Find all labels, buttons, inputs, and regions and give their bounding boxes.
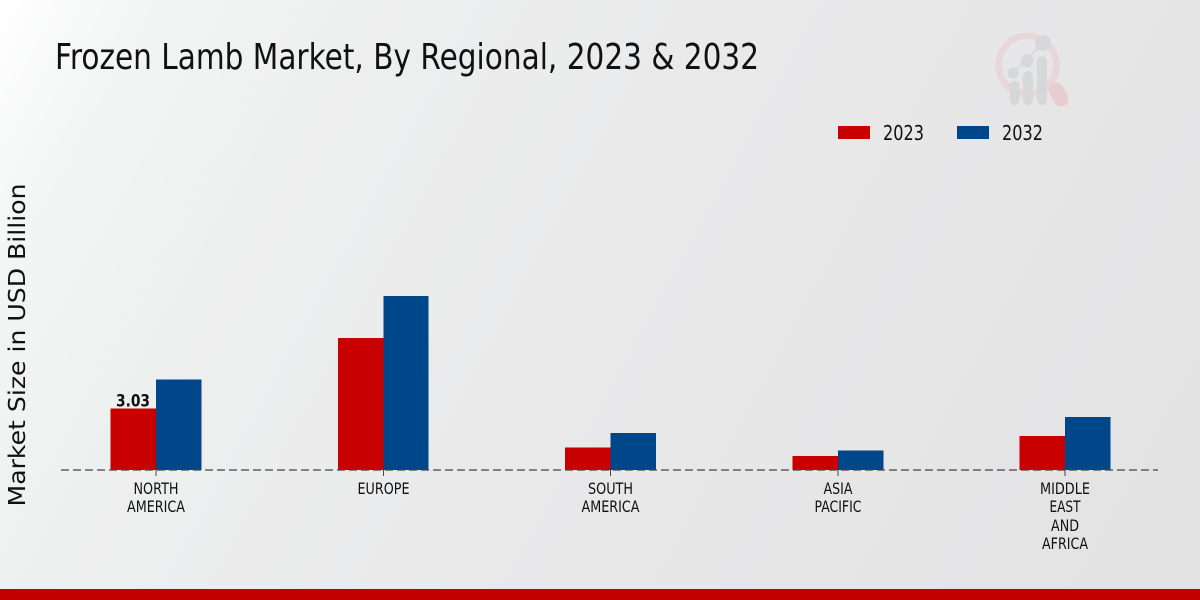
label: Asia Pacific: PACIFIC bbox=[814, 497, 862, 516]
label: South America: AMERICA bbox=[582, 497, 640, 516]
legend item: 2023 bbox=[838, 121, 924, 145]
legend bbox=[838, 121, 1043, 145]
label: South America: SOUTH bbox=[588, 479, 633, 498]
label: Middle East and Africa: AFRICA bbox=[1042, 534, 1088, 553]
label: Europe: EUROPE bbox=[358, 479, 410, 498]
y axis title: Market Size in USD Billion bbox=[3, 184, 31, 506]
legend item: 2023: 2023 bbox=[883, 121, 924, 145]
label: North America: AMERICA bbox=[127, 497, 185, 516]
group: South America bbox=[565, 433, 656, 476]
legend item: 2032 bbox=[957, 121, 1043, 145]
label: North America: NORTH bbox=[134, 479, 178, 498]
label: Middle East and Africa: AND bbox=[1051, 516, 1079, 535]
group: Asia Pacific bbox=[792, 450, 884, 476]
group: North America bbox=[110, 380, 202, 476]
label: North America bbox=[127, 479, 185, 516]
bar chart bbox=[61, 296, 1158, 476]
category labels bbox=[127, 479, 1090, 553]
title: Frozen Lamb Market, By Regional, 2023 & 2032 bbox=[55, 37, 759, 78]
label: South America bbox=[582, 479, 640, 516]
group: Middle East and Africa bbox=[1020, 417, 1110, 476]
label: Middle East and Africa: EAST bbox=[1050, 497, 1081, 516]
legend item: 2032: 2032 bbox=[1002, 121, 1043, 145]
footer bar bbox=[0, 589, 1200, 600]
data label: 3.03 bbox=[116, 392, 150, 412]
label: Asia Pacific bbox=[814, 479, 862, 516]
group: Europe bbox=[338, 296, 428, 476]
label: Middle East and Africa bbox=[1040, 479, 1090, 553]
label: Asia Pacific: ASIA bbox=[824, 479, 853, 498]
baseline axis bbox=[61, 469, 1158, 471]
label: Middle East and Africa: MIDDLE bbox=[1040, 479, 1090, 498]
icon: logo magnifier with bars bbox=[998, 35, 1061, 105]
